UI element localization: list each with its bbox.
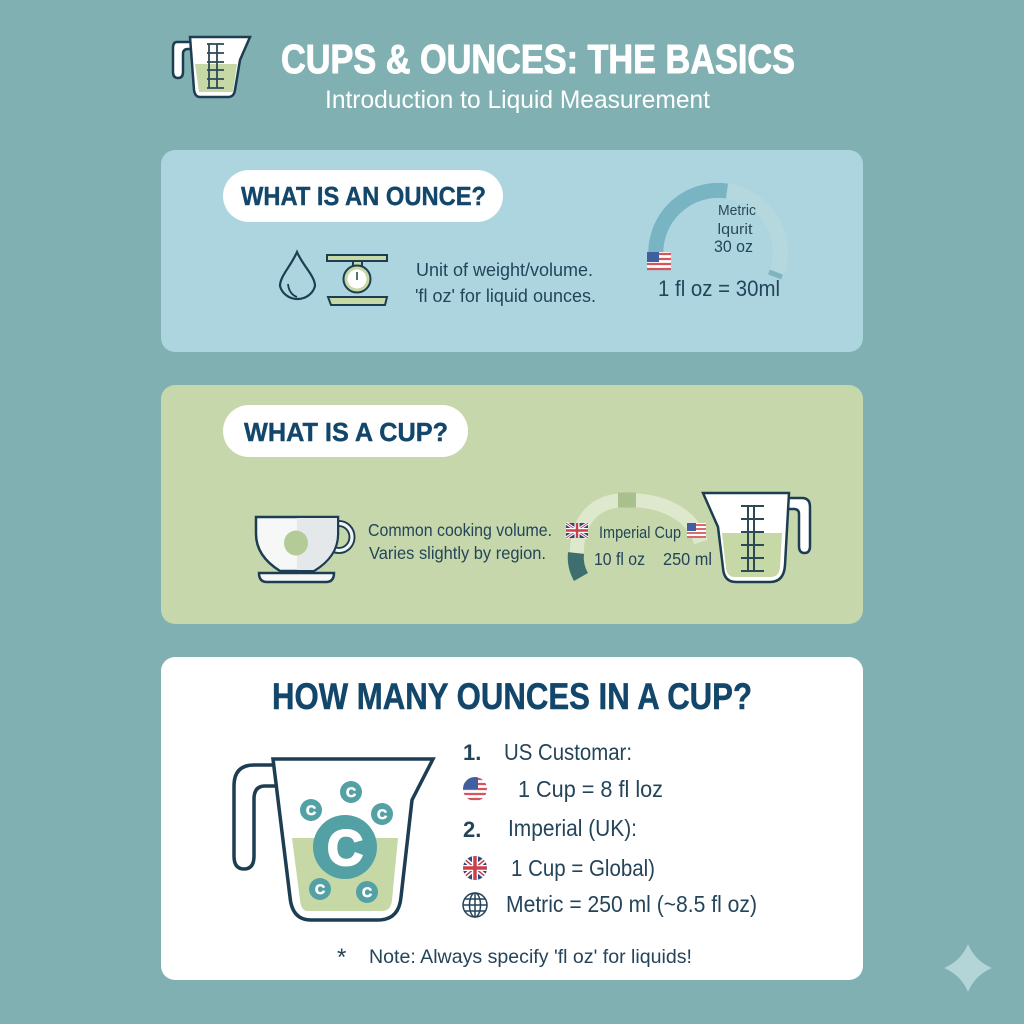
list: measurement systems: US Customar:	[504, 739, 632, 765]
icon: sparkle	[944, 944, 992, 992]
icon: large jug with C coins: C	[327, 820, 363, 876]
panel: how many ounces in a cup	[161, 657, 863, 980]
gauge: cup arc: 10 fl oz	[594, 549, 645, 569]
header	[173, 36, 795, 114]
icon: US flag round	[463, 777, 487, 801]
icon: scale	[327, 255, 387, 305]
icon: large jug with C coins	[234, 759, 433, 920]
icon: large jug with C coins: C	[362, 884, 372, 900]
gauge: cup arc	[576, 500, 712, 577]
icon: water drop	[280, 252, 315, 299]
panel: what is an ounce	[161, 150, 863, 352]
ounce description: 'fl oz' for liquid ounces.	[415, 286, 596, 306]
icon: small measuring jug	[173, 37, 250, 97]
icon: UK flag round	[463, 856, 487, 880]
heading pill: cup: WHAT IS A CUP?	[244, 417, 448, 447]
cup description: Varies slightly by region.	[369, 543, 546, 563]
icon: large jug with C coins: C	[315, 881, 325, 897]
heading: how many ounces: HOW MANY OUNCES IN A CUP?	[272, 676, 752, 717]
list: measurement systems: Imperial (UK):	[508, 815, 637, 841]
list: measurement systems: 1.	[463, 740, 481, 765]
note: Note: Always specify 'fl oz' for liquids!	[369, 946, 692, 968]
panel: what is a cup	[161, 385, 863, 624]
heading pill: ounce	[223, 170, 503, 222]
ounce description	[415, 260, 596, 306]
list: measurement systems: Metric = 250 ml (~8.5 fl oz)	[506, 891, 757, 917]
heading pill: ounce: WHAT IS AN OUNCE?	[241, 181, 486, 211]
gauge: ounce arc	[656, 190, 782, 301]
gauge: ounce arc: Metric	[718, 203, 756, 219]
icon: globe	[463, 893, 487, 917]
ounce description: Unit of weight/volume.	[416, 260, 593, 280]
gauge: cup arc: Imperial Cup	[599, 524, 681, 542]
gauge: ounce arc: 1 fl oz = 30ml	[658, 276, 780, 301]
gauge: ounce arc: lqurit	[718, 222, 752, 238]
gauge: cup arc: 250 ml	[663, 549, 712, 569]
list: measurement systems: 1 Cup = 8 fl loz	[518, 776, 663, 802]
title: CUPS & OUNCES: THE BASICS	[281, 36, 795, 82]
icon: UK flag	[566, 523, 588, 538]
icon: large jug with C coins: C	[306, 802, 316, 818]
cup description	[368, 520, 552, 563]
list: measurement systems: 2.	[463, 817, 481, 842]
icon: measuring jug	[703, 493, 810, 582]
icon: US flag	[647, 252, 671, 270]
heading pill: cup	[223, 405, 468, 457]
icon: US flag small	[687, 523, 706, 538]
subtitle: Introduction to Liquid Measurement	[325, 86, 710, 114]
list: measurement systems: 1 Cup = Global)	[511, 855, 655, 881]
icon: large jug with C coins: C	[377, 806, 387, 822]
cup description: Common cooking volume.	[368, 520, 552, 540]
list: measurement systems	[463, 739, 757, 917]
gauge: ounce arc: 30 oz	[714, 238, 753, 256]
icon: teacup	[256, 517, 352, 582]
icon: large jug with C coins: C	[346, 784, 356, 800]
note: *	[337, 944, 346, 971]
